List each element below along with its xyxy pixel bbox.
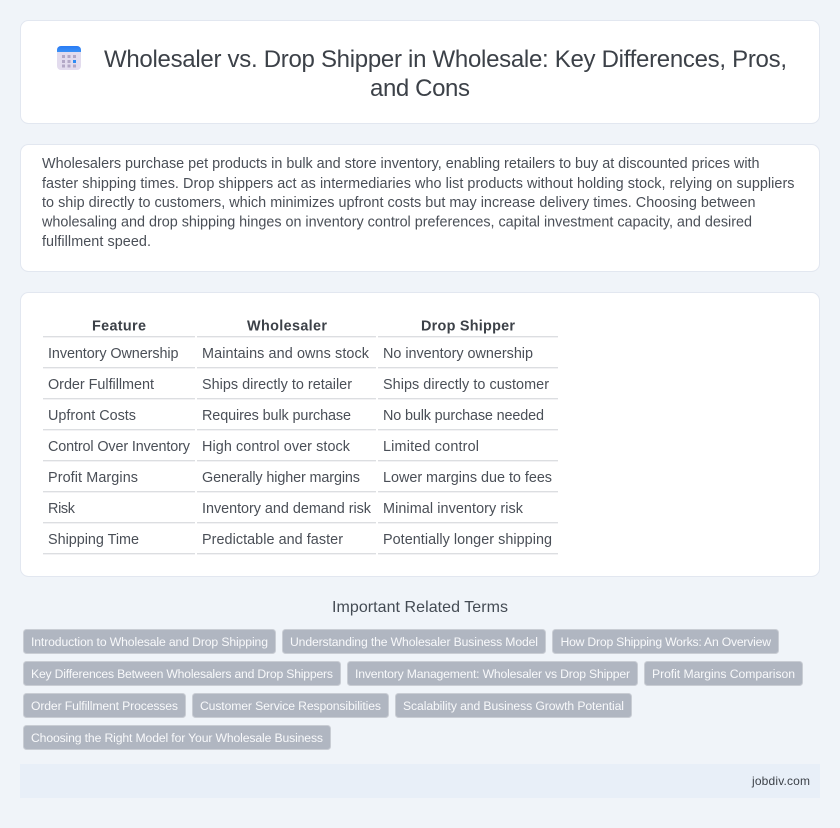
row: inventory ownership	[48, 346, 533, 362]
tag	[348, 662, 638, 686]
row: shipping time	[48, 532, 552, 548]
row: risk	[48, 501, 524, 517]
tag	[24, 694, 186, 718]
title: and Cons	[370, 75, 470, 102]
row: control over inventory: Control Over Inventory	[48, 439, 191, 455]
panel: summary paragraph	[20, 144, 820, 272]
row: profit margins: Lower margins due to fees	[383, 470, 552, 486]
table header: Drop Shipper	[421, 318, 515, 334]
tag: Customer Service Responsibilities	[200, 699, 381, 713]
row: shipping time: Shipping Time	[48, 532, 139, 548]
summary text: faster shipping times. Drop shippers act as intermediaries who list products without holding stock, relying on suppliers	[42, 176, 794, 192]
tag	[644, 662, 802, 686]
tag	[24, 726, 330, 750]
row: order fulfillment	[48, 377, 549, 393]
row: profit margins: Generally higher margins	[202, 470, 360, 486]
row: risk: Risk	[48, 501, 76, 517]
row: upfront costs: Requires bulk purchase	[202, 408, 351, 424]
table header: Wholesaler	[247, 318, 327, 334]
row: inventory ownership: No inventory ownership	[383, 346, 533, 362]
tag: Key Differences Between Wholesalers and Drop Shippers	[31, 667, 333, 681]
panel: comparison table	[20, 292, 820, 576]
row: upfront costs: Upfront Costs	[48, 408, 136, 424]
tag	[192, 694, 388, 718]
row: upfront costs: No bulk purchase needed	[383, 408, 544, 424]
tag: Understanding the Wholesaler Business Model	[290, 635, 538, 649]
row: profit margins	[48, 470, 552, 486]
row: shipping time: Predictable and faster	[202, 532, 343, 548]
footer	[20, 764, 820, 798]
tag	[24, 630, 276, 654]
row: control over inventory	[48, 439, 479, 455]
row: shipping time: Potentially longer shipping	[383, 532, 552, 548]
row: upfront costs	[48, 408, 544, 424]
icon: calendar	[57, 46, 81, 70]
summary text: Wholesalers purchase pet products in bulk and store inventory, enabling retailers to buy at discounted prices with	[42, 156, 760, 172]
tag: Choosing the Right Model for Your Wholesale Business	[31, 731, 323, 745]
table header	[92, 318, 515, 334]
tag: Order Fulfillment Processes	[31, 699, 178, 713]
related term tags	[24, 630, 802, 750]
tag: Scalability and Business Growth Potential	[403, 699, 624, 713]
table header: Feature	[92, 318, 146, 334]
row: inventory ownership: Inventory Ownership	[48, 346, 178, 362]
row: profit margins: Profit Margins	[48, 470, 138, 486]
title: Wholesaler vs. Drop Shipper in Wholesale: Key Differences, Pros,	[104, 46, 787, 73]
footer: jobdiv.com	[751, 774, 810, 788]
tag	[24, 662, 340, 686]
tag	[552, 630, 778, 654]
row: control over inventory: High control over stock	[202, 439, 351, 455]
header panel	[20, 20, 820, 124]
tag	[396, 694, 632, 718]
summary text: fulfillment speed.	[42, 234, 151, 250]
title	[104, 46, 787, 102]
row: risk: Minimal inventory risk	[383, 501, 524, 517]
summary text	[41, 156, 794, 250]
tag: Profit Margins Comparison	[652, 667, 795, 681]
row: risk: Inventory and demand risk	[202, 501, 372, 517]
row: order fulfillment: Order Fulfillment	[48, 377, 154, 393]
row: control over inventory: Limited control	[383, 439, 479, 455]
heading: important related terms: Important Related Terms	[332, 599, 508, 616]
tag: Introduction to Wholesale and Drop Shipping	[31, 635, 268, 649]
summary text: to ship directly to customers, which minimizes upfront costs but may increase delivery times. Choosing between	[42, 195, 756, 211]
tag: How Drop Shipping Works: An Overview	[560, 635, 771, 649]
tag: Inventory Management: Wholesaler vs Drop Shipper	[355, 667, 630, 681]
summary text: wholesaling and drop shipping hinges on inventory control preferences, capital investment capacity, and desired	[41, 214, 752, 230]
tag	[282, 630, 546, 654]
row: order fulfillment: Ships directly to customer	[383, 377, 549, 393]
row: inventory ownership: Maintains and owns stock	[202, 346, 370, 362]
row: order fulfillment: Ships directly to retailer	[202, 377, 352, 393]
